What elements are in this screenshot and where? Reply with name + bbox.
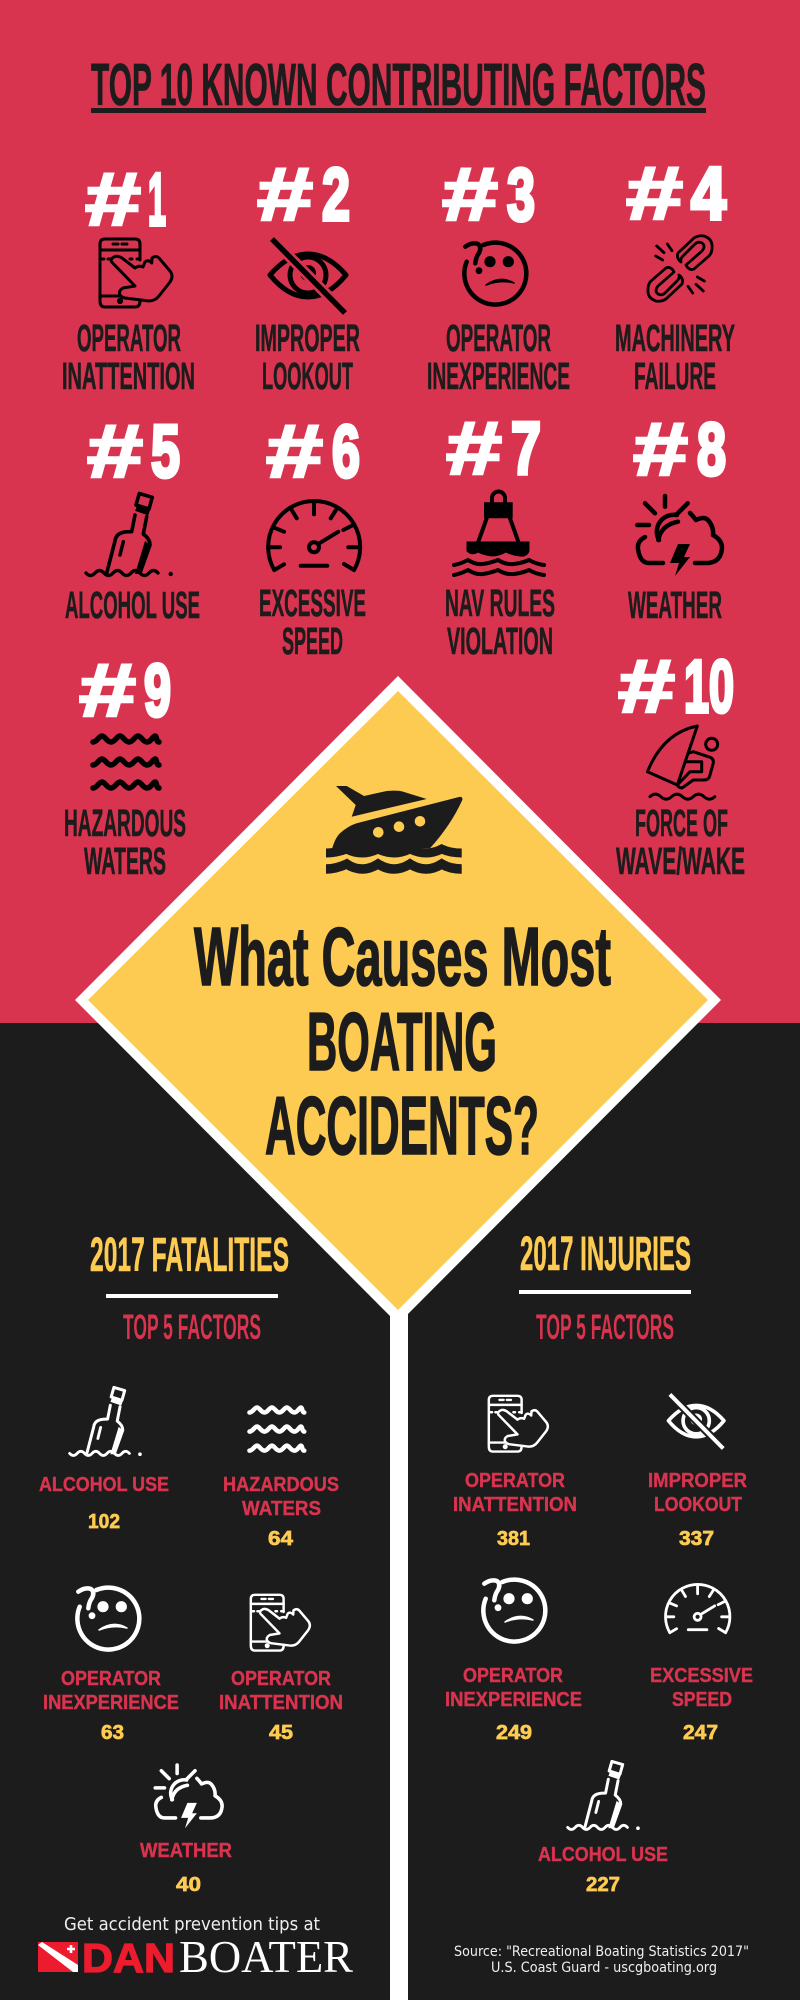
factor 1: operator inattention: OPERATOR (77, 317, 181, 360)
icon: boat (326, 786, 462, 869)
factor 10: force of wave/wake (616, 644, 745, 883)
factor 2: improper lookout: # (257, 152, 313, 236)
factor 8: weather (628, 407, 726, 627)
injury: alcohol use: 227 (586, 1874, 620, 1896)
injury: operator inexperience (445, 1580, 582, 1744)
logo: DAN Boater (38, 1932, 353, 1982)
fatality: alcohol use (39, 1387, 169, 1533)
injury: alcohol use (538, 1761, 668, 1896)
factor 6: excessive speed: # (266, 409, 323, 493)
footer call to action: Get accident prevention tips at (64, 1914, 320, 1935)
factor 8: weather: 8 (697, 408, 726, 491)
injury: excessive speed (650, 1584, 753, 1744)
diamond sign (75, 676, 721, 1324)
fatality: alcohol use: 102 (88, 1511, 120, 1533)
icon: windsurfer (648, 726, 718, 799)
factor 2: improper lookout: LOOKOUT (262, 355, 353, 398)
fatality: operator inattention (219, 1595, 343, 1744)
panel: 2017 injuries (445, 1228, 753, 1896)
fatality: hazardous waters (223, 1407, 339, 1550)
factor 6: excessive speed: SPEED (282, 620, 343, 663)
fatality: weather: WEATHER (140, 1840, 232, 1862)
factor 2: improper lookout: IMPROPER (255, 317, 360, 360)
fatality: operator inattention: INATTENTION (219, 1692, 343, 1714)
injury: alcohol use: ALCOHOL USE (538, 1844, 668, 1866)
source note: U.S. Coast Guard - uscgboating.org (491, 1960, 717, 1976)
injury: excessive speed: SPEED (672, 1689, 732, 1711)
injury: operator inattention (453, 1396, 577, 1550)
factor 5: alcohol use: # (87, 409, 143, 493)
panel: 2017 fatalities (39, 1229, 343, 1896)
injury: operator inattention: 381 (497, 1528, 530, 1550)
fatality: operator inexperience (43, 1588, 179, 1744)
factor 7: nav rules violation: VIOLATION (447, 620, 553, 663)
text: HAZARDOUS (64, 802, 186, 845)
main heading: BOATING (307, 995, 497, 1088)
factor 5: alcohol use (65, 409, 200, 627)
fatality: weather: 40 (176, 1874, 201, 1896)
main heading (194, 910, 611, 1172)
factor 4: machinery failure (615, 151, 735, 398)
factor 7: nav rules violation: NAV RULES (445, 582, 555, 625)
injury: operator inattention: OPERATOR (465, 1470, 565, 1492)
factor 4: machinery failure: FAILURE (634, 355, 716, 398)
factor 10: force of wave/wake: # (618, 644, 675, 728)
logo: DAN Boater: DAN (82, 1935, 175, 1981)
logo: DAN Boater: BOATER (179, 1932, 353, 1982)
main heading: ACCIDENTS? (265, 1079, 539, 1172)
factor 1: operator inattention (62, 157, 195, 398)
injury: improper lookout: IMPROPER (648, 1470, 747, 1492)
injury: excessive speed: 247 (683, 1722, 718, 1744)
factor 1: operator inattention: # (85, 157, 141, 241)
factor 9: hazardous waters: # (79, 648, 136, 732)
fatality: hazardous waters: WATERS (242, 1498, 321, 1520)
injury: operator inexperience: OPERATOR (463, 1665, 563, 1687)
fatality: operator inattention: 45 (269, 1722, 293, 1744)
source note (454, 1944, 749, 1976)
factor 10: force of wave/wake: 10 (684, 645, 734, 728)
injury: improper lookout: LOOKOUT (654, 1494, 742, 1516)
text: EXCESSIVE (259, 582, 366, 625)
fatality: hazardous waters: HAZARDOUS (223, 1474, 339, 1496)
heading: fatalities: 2017 FATALITIES (90, 1229, 289, 1282)
factor 2: improper lookout: 2 (322, 153, 350, 236)
source note: Source: "Recreational Boating Statistics 2017" (454, 1944, 749, 1960)
factor 7: nav rules violation: # (446, 406, 502, 490)
injury: operator inattention: INATTENTION (453, 1494, 577, 1516)
injury: operator inexperience: INEXPERIENCE (445, 1689, 582, 1711)
factor 1: operator inattention: INATTENTION (62, 355, 195, 398)
factor 7: nav rules violation: 7 (511, 407, 541, 490)
signpost pole (390, 1300, 408, 2000)
factor 5: alcohol use: 5 (151, 410, 180, 493)
factor 7: nav rules violation (445, 406, 555, 663)
fatality: alcohol use: ALCOHOL USE (39, 1474, 169, 1496)
panel: 2017 fatalities: TOP 5 FACTORS (123, 1308, 261, 1347)
factor 3: operator inexperience: INEXPERIENCE (427, 355, 570, 398)
background: red upper section (0, 0, 800, 1024)
factor 3: operator inexperience: 3 (507, 153, 535, 236)
fatality: operator inexperience: INEXPERIENCE (43, 1692, 179, 1714)
injury: operator inexperience: 249 (496, 1722, 532, 1744)
factor 3: operator inexperience (427, 152, 570, 398)
factor 9: hazardous waters: WATERS (84, 840, 166, 883)
factor 6: excessive speed (259, 409, 366, 663)
fatality: hazardous waters: 64 (268, 1528, 294, 1550)
factor 3: operator inexperience: # (442, 152, 498, 236)
factor 8: weather: # (633, 407, 688, 491)
fatality: operator inexperience: 63 (101, 1722, 124, 1744)
factor 6: excessive speed: 6 (332, 410, 360, 493)
factor 1: operator inattention: 1 (148, 158, 166, 241)
fatality: operator inattention: OPERATOR (231, 1668, 331, 1690)
fatality: weather (140, 1765, 232, 1896)
injury: excessive speed: EXCESSIVE (650, 1665, 753, 1687)
factor 9: hazardous waters: 9 (144, 649, 171, 732)
injury: improper lookout: 337 (679, 1528, 714, 1550)
factor 4: machinery failure: 4 (691, 152, 726, 235)
factor 4: machinery failure: # (626, 151, 683, 235)
fatality: operator inexperience: OPERATOR (61, 1668, 161, 1690)
factor 2: improper lookout (255, 152, 360, 398)
injury: improper lookout (648, 1394, 747, 1550)
factor 9: hazardous waters (64, 648, 186, 883)
background: black lower section (0, 1023, 800, 2000)
factor 3: operator inexperience: OPERATOR (446, 317, 551, 360)
text: ALCOHOL USE (65, 584, 200, 627)
